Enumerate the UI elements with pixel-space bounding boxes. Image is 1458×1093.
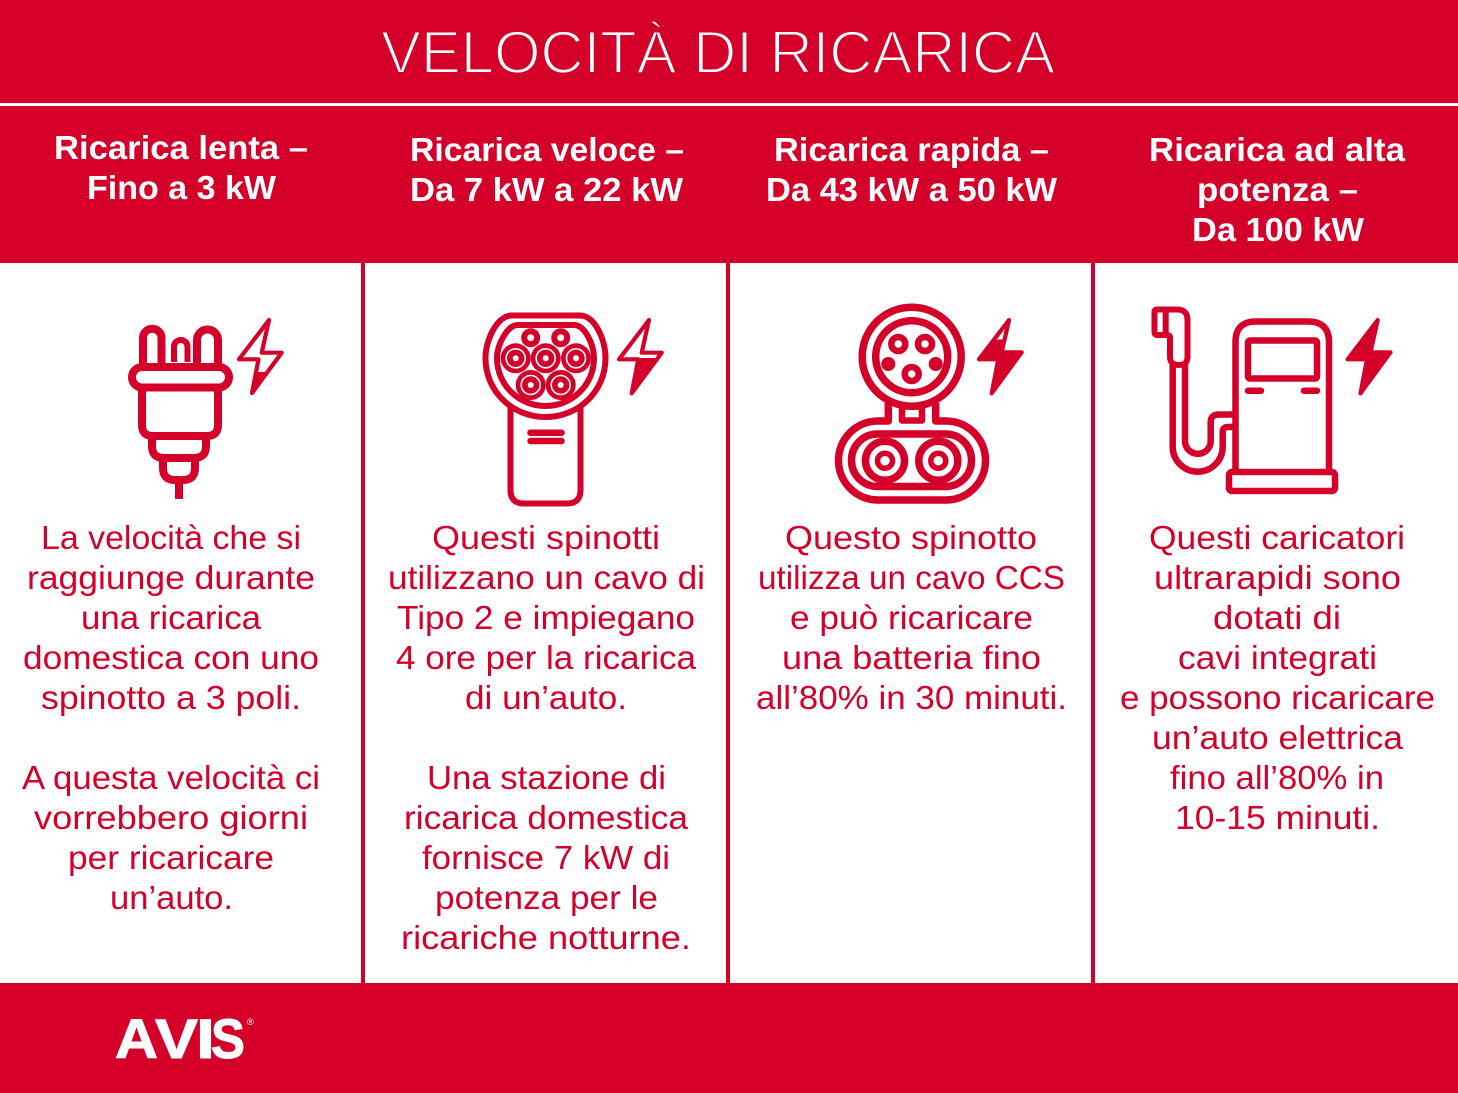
heading: ricarica ad alta potenza: potenza – <box>1197 171 1358 208</box>
text block: ricarica ad alta potenza: ultrarapidi sono <box>1154 559 1401 596</box>
footer band <box>0 983 1458 1093</box>
text block: ricarica rapida: all’80% in 30 minuti. <box>756 679 1067 716</box>
heading: ricarica lenta: Ricarica lenta – <box>54 129 308 166</box>
text block: ricarica ad alta potenza <box>1120 519 1435 836</box>
heading: ricarica ad alta potenza: Da 100 kW <box>1192 211 1365 248</box>
text block: ricarica rapida: una batteria fino <box>782 639 1041 676</box>
icon: plug with lightning bolt <box>132 320 282 499</box>
text block: ricarica rapida: e può ricaricare <box>790 599 1033 636</box>
text block: ricarica veloce: Tipo 2 e impiegano <box>397 599 695 636</box>
text block: ricarica lenta: A questa velocità ci <box>22 759 320 796</box>
heading: ricarica veloce: Da 7 kW a 22 kW <box>410 171 684 208</box>
logo: AVIS: S <box>211 1007 245 1070</box>
text block: ricarica lenta <box>22 519 320 916</box>
text block: ricarica rapida <box>756 519 1067 716</box>
text block: ricarica veloce: fornisce 7 kW di <box>422 839 670 876</box>
text block: ricarica lenta: vorrebbero giorni <box>34 799 308 836</box>
icon: CCS connector with lightning bolt <box>838 307 1022 500</box>
text block: ricarica veloce: ricarica domestica <box>404 799 689 836</box>
heading: ricarica ad alta potenza: Ricarica ad alta <box>1149 131 1406 168</box>
title banner <box>0 0 1458 103</box>
text block: ricarica veloce: potenza per le <box>435 879 658 916</box>
text block: ricarica lenta: spinotto a 3 poli. <box>41 679 301 716</box>
text block: ricarica ad alta potenza: 10-15 minuti. <box>1175 799 1380 836</box>
text block: ricarica lenta: raggiunge durante <box>27 559 315 596</box>
text block: ricarica veloce: 4 ore per la ricarica <box>396 639 697 676</box>
icon: type 2 connector with lightning bolt <box>486 316 662 504</box>
heading: ricarica lenta: Fino a 3 kW <box>87 169 277 206</box>
logo: AVIS: I <box>196 1007 215 1070</box>
header band <box>0 106 1458 263</box>
logo: AVIS: V <box>155 1007 198 1070</box>
text block: ricarica lenta: un’auto. <box>110 879 233 916</box>
text block: ricarica lenta: una ricarica <box>81 599 262 636</box>
text block: ricarica lenta: per ricaricare <box>68 839 274 876</box>
logo: AVIS: ® <box>247 1017 254 1027</box>
heading: ricarica rapida: Ricarica rapida – <box>774 131 1049 168</box>
text block: ricarica ad alta potenza: un’auto elettrica <box>1152 719 1404 756</box>
text block: ricarica veloce: ricariche notturne. <box>401 919 691 956</box>
text block: ricarica ad alta potenza: cavi integrati <box>1178 639 1377 676</box>
heading: ricarica veloce <box>410 131 684 208</box>
text block: ricarica rapida: utilizza un cavo CCS <box>758 559 1065 596</box>
title: VELOCITÀ DI RICARICA <box>381 19 1055 86</box>
text block: ricarica lenta: La velocità che si <box>41 519 301 556</box>
logo: AVIS <box>115 1007 254 1070</box>
text block: ricarica ad alta potenza: dotati di <box>1213 599 1341 636</box>
text block: ricarica lenta: domestica con uno <box>23 639 319 676</box>
text block: ricarica ad alta potenza: fino all’80% in <box>1170 759 1384 796</box>
text block: ricarica ad alta potenza: Questi caricatori <box>1149 519 1405 556</box>
icon: fast charging station with lightning bolt <box>1154 310 1390 491</box>
text block: ricarica veloce: di un’auto. <box>465 679 627 716</box>
text block: ricarica rapida: Questo spinotto <box>785 519 1037 556</box>
text block: ricarica ad alta potenza: e possono ricaricare <box>1120 679 1435 716</box>
text block: ricarica veloce: Una stazione di <box>427 759 666 796</box>
text block: ricarica veloce: utilizzano un cavo di <box>388 559 705 596</box>
heading: ricarica ad alta potenza <box>1149 131 1406 248</box>
heading: ricarica rapida <box>766 131 1058 208</box>
text block: ricarica veloce <box>388 519 705 956</box>
heading: ricarica rapida: Da 43 kW a 50 kW <box>766 171 1058 208</box>
heading: ricarica veloce: Ricarica veloce – <box>410 131 684 168</box>
text block: ricarica veloce: Questi spinotti <box>432 519 660 556</box>
logo: AVIS: A <box>115 1007 158 1070</box>
heading: ricarica lenta <box>54 129 308 206</box>
